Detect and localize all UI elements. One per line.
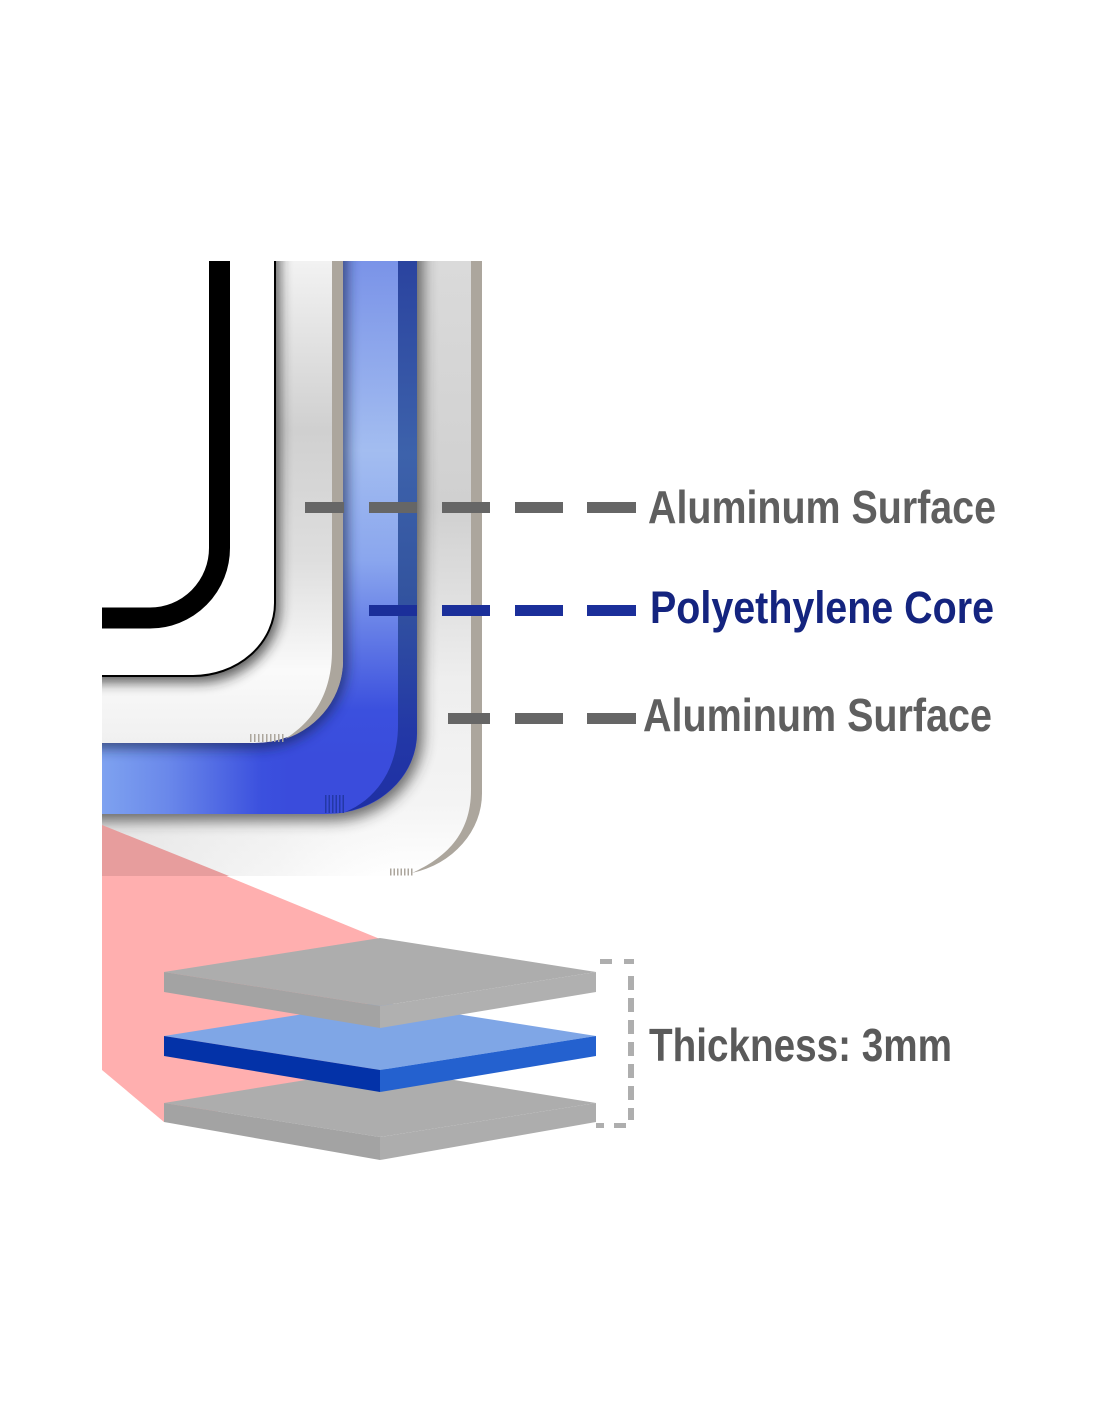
shadow cast by the inner aluminum on the core bbox=[80, 240, 348, 749]
shadow cast by the core on the outer layer bbox=[80, 240, 423, 821]
magnification wedge in pink bbox=[102, 825, 380, 1122]
inner aluminum layer bbox=[102, 261, 343, 743]
label: polyethylene core: Polyethylene Core bbox=[650, 582, 994, 633]
polyethylene core layer bbox=[102, 261, 417, 814]
black inner line bbox=[90, 250, 220, 618]
exploded view: bottom aluminum sheet bbox=[164, 1068, 596, 1160]
exploded view: top aluminum sheet bbox=[164, 938, 596, 1028]
panel: corner cross-section of the composite layers bbox=[80, 240, 482, 876]
exploded view: blue polyethylene core sheet bbox=[164, 1002, 596, 1092]
dashed leader: polyethylene core bbox=[369, 605, 636, 616]
label: lower aluminum surface: Aluminum Surface bbox=[643, 689, 992, 741]
dashed leader: upper aluminum surface bbox=[305, 502, 636, 513]
shadow cast by the white interior bbox=[80, 240, 280, 683]
infographic: aluminum composite panel cross-section bbox=[102, 261, 995, 1160]
outer aluminum layer bbox=[102, 261, 482, 876]
thickness dashed bracket bbox=[596, 959, 634, 1128]
label: upper aluminum surface: Aluminum Surface bbox=[648, 481, 996, 533]
label: thickness: Thickness: 3mm bbox=[649, 1019, 952, 1071]
dashed leader: lower aluminum surface bbox=[448, 713, 636, 724]
white interior with thin black outline bbox=[90, 250, 275, 676]
